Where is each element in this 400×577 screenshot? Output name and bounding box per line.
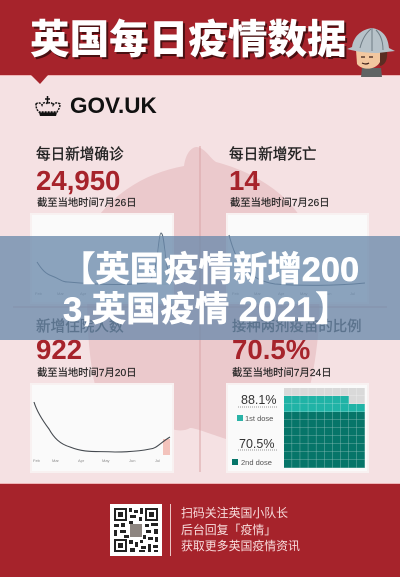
chart: deaths line: Jul xyxy=(350,291,355,296)
chart: deaths line: Jun xyxy=(325,291,331,296)
chart: deaths line: May xyxy=(300,291,308,296)
chart: dose waffle: 70.5% xyxy=(239,437,274,451)
date: 截至当地时间7月26日 xyxy=(37,198,137,209)
number: 14 xyxy=(229,165,260,196)
chart: cases line xyxy=(32,215,172,302)
chart: admissions line: Jul xyxy=(155,458,160,463)
footer band xyxy=(0,484,400,577)
chart: cases line: May xyxy=(104,291,112,296)
chart: admissions line: Feb xyxy=(33,458,41,463)
heading: 每日新增确诊 xyxy=(36,147,124,163)
banner title xyxy=(61,250,359,329)
banner title: 【英国疫情新增200 xyxy=(61,251,359,289)
number: 922 xyxy=(36,334,82,365)
chart: deaths line: Mar xyxy=(254,291,262,296)
number: 70.5% xyxy=(232,334,310,365)
chart: admissions line: Apr xyxy=(78,458,85,463)
chart: admissions line: May xyxy=(102,458,110,463)
panel: new hospital admissions xyxy=(30,318,174,473)
chart: cases line: Jul xyxy=(152,291,157,296)
chart: dose waffle: 1st dose xyxy=(245,414,273,423)
footer line 3: 获取更多英国疫情资讯 xyxy=(181,539,300,553)
chart: admissions line: Jun xyxy=(129,458,135,463)
title: 英国每日疫情数据 xyxy=(30,18,347,62)
footer line 1: 扫码关注英国小队长 xyxy=(181,506,288,520)
chart: cases line: Apr xyxy=(80,291,87,296)
icon: crown xyxy=(35,96,61,116)
heading: 新增住院人数 xyxy=(36,319,124,335)
heading: 接种两剂疫苗的比例 xyxy=(232,319,362,335)
footer line 2: 后台回复「疫情」 xyxy=(181,523,276,537)
icon: detective mascot xyxy=(347,28,395,77)
chart: cases line: Mar xyxy=(57,291,65,296)
chart: dose waffle: 88.1% xyxy=(241,393,276,407)
overlay banner xyxy=(0,236,400,340)
chart: dose waffle xyxy=(228,385,367,471)
chart: dose waffle: 2nd dose xyxy=(241,458,272,467)
chart: cases line: Feb xyxy=(35,291,43,296)
chart: deaths line: Feb xyxy=(232,291,240,296)
number: 24,950 xyxy=(36,165,120,196)
chart: cases line: Jun xyxy=(128,291,134,296)
QR code xyxy=(110,504,162,556)
logo: GOV.UK xyxy=(35,93,157,118)
logo wordmark: GOV.UK xyxy=(70,93,157,118)
header band xyxy=(0,0,400,84)
date: 截至当地时间7月24日 xyxy=(232,368,332,379)
panel: daily new cases xyxy=(30,146,174,304)
chart: admissions line: Mar xyxy=(52,458,60,463)
chart: deaths line: Apr xyxy=(278,291,285,296)
chart: admissions line xyxy=(32,385,172,471)
panel: two-dose vaccination share xyxy=(226,318,369,473)
footer text xyxy=(181,506,300,553)
footer divider xyxy=(170,504,171,556)
date: 截至当地时间7月26日 xyxy=(230,198,330,209)
banner title: 3,英国疫情 2021】 xyxy=(63,291,350,329)
header background xyxy=(0,0,400,84)
panel: daily new deaths xyxy=(226,146,369,304)
heading: 每日新增死亡 xyxy=(229,147,317,163)
date: 截至当地时间7月20日 xyxy=(37,368,137,379)
chart: deaths line xyxy=(228,215,367,302)
